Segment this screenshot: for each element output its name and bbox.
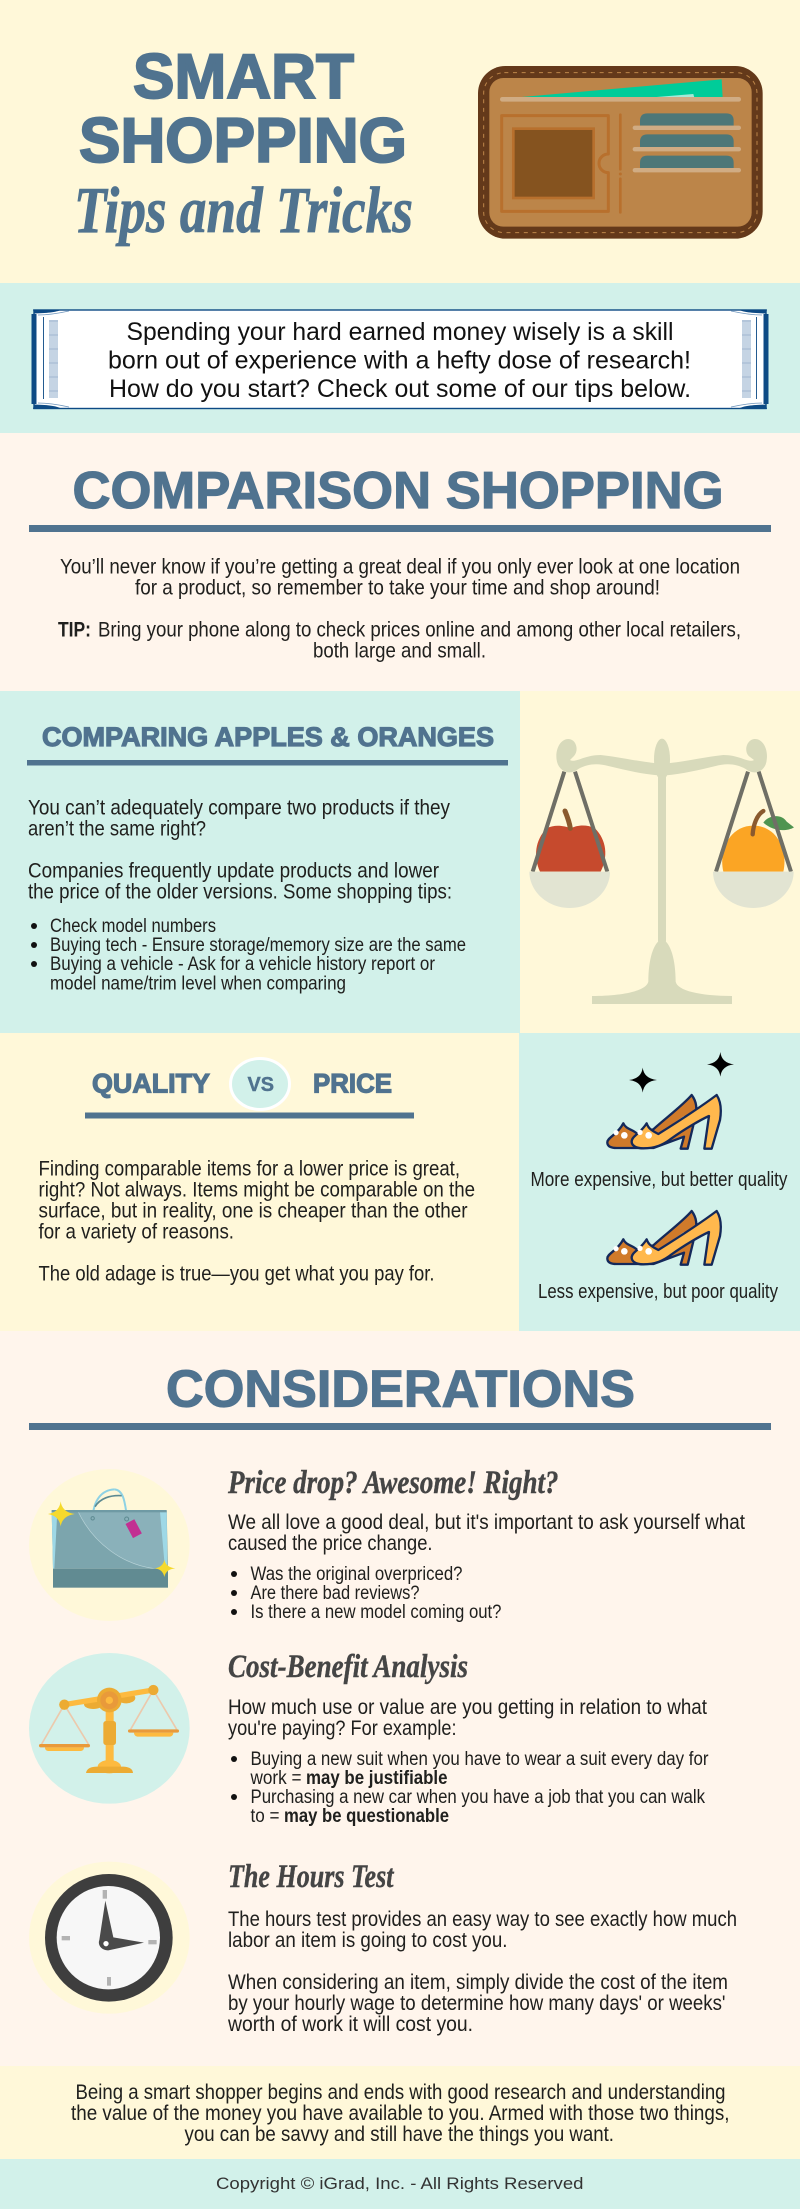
icon: wallet bbox=[478, 66, 763, 239]
heading: comparison shopping: COMPARISON SHOPPING bbox=[72, 462, 724, 520]
list: shopping tips bbox=[31, 916, 466, 994]
heading: considerations: CONSIDERATIONS bbox=[166, 1360, 635, 1418]
icon: expensive shoes bbox=[607, 1095, 721, 1149]
text: price drop body: Was the original overpriced? bbox=[250, 1564, 462, 1585]
icon: cheaper shoes bbox=[607, 1211, 721, 1265]
text: quality vs price body: Finding comparable items for a lower price is great, bbox=[38, 1158, 460, 1180]
title bbox=[74, 42, 413, 247]
heading: price drop: Price drop? Awesome! Right? bbox=[227, 1465, 558, 1501]
text: cost-benefit body bbox=[228, 1696, 709, 1827]
text: price drop body: Are there bad reviews? bbox=[250, 1583, 420, 1604]
footer: copyright: Copyright © iGrad, Inc. - All Rights Reserved bbox=[216, 2174, 584, 2193]
text: cost-benefit body: work = bbox=[250, 1768, 302, 1789]
text: quality vs price body: right? Not always. Items might be comparable on the bbox=[38, 1178, 475, 1202]
text: apples and oranges body: the price of the older versions. Some shopping tips: bbox=[28, 880, 452, 904]
text: comparison intro and tip: TIP: bbox=[58, 618, 91, 642]
list: shopping tips: Check model numbers bbox=[50, 916, 216, 937]
banner: intro: born out of experience with a hefty dose of research! bbox=[108, 346, 691, 374]
text: hours test body: worth of work it will cost you. bbox=[227, 2013, 473, 2036]
text: closing statement bbox=[71, 2081, 730, 2146]
icon: shopping bag bbox=[29, 1469, 190, 1621]
text: hours test body bbox=[227, 1908, 737, 2036]
heading: comparing apples and oranges bbox=[27, 722, 508, 766]
text: cost-benefit body: you're paying? For example: bbox=[228, 1717, 456, 1740]
text: cost-benefit body: Purchasing a new car when you have a job that you can walk bbox=[250, 1787, 705, 1808]
text: apples and oranges body bbox=[28, 796, 452, 904]
icon: clock bbox=[29, 1862, 190, 2014]
text: price drop body bbox=[228, 1511, 745, 1623]
heading: quality vs price: PRICE bbox=[313, 1068, 392, 1098]
text: hours test body: The hours test provides an easy way to see exactly how much bbox=[228, 1908, 737, 1931]
text: comparison intro and tip: for a product, so remember to take your time and shop around! bbox=[135, 576, 660, 600]
title: Tips and Tricks bbox=[74, 174, 413, 247]
icon: balance with apple and orange bbox=[529, 739, 794, 1004]
text: closing statement: you can be savvy and still have the things you want. bbox=[184, 2123, 614, 2146]
list: shopping tips: Buying a vehicle - Ask for a vehicle history report or bbox=[50, 954, 436, 975]
text: cost-benefit body: may be questionable bbox=[284, 1806, 449, 1827]
text: price drop body: Is there a new model coming out? bbox=[250, 1602, 502, 1623]
heading: quality vs price: QUALITY bbox=[92, 1068, 210, 1098]
title: SHOPPING bbox=[79, 106, 407, 176]
text: cost-benefit body: may be justifiable bbox=[306, 1768, 448, 1789]
banner: intro: How do you start? Check out some of our tips below. bbox=[109, 375, 691, 403]
text: hours test body: When considering an item, simply divide the cost of the item bbox=[228, 1971, 728, 1994]
heading: quality vs price: VS bbox=[248, 1074, 274, 1096]
text: apples and oranges body: You can’t adequately compare two products if they bbox=[28, 796, 450, 820]
text: closing statement: the value of the money you have available to you. Armed with those two things, bbox=[71, 2102, 730, 2125]
text: comparison intro and tip: You’ll never know if you’re getting a great deal if you only ever look at one location bbox=[60, 556, 740, 578]
text: hours test body: labor an item is going to cost you. bbox=[228, 1929, 508, 1952]
text: cost-benefit body: Buying a new suit when you have to wear a suit every day for bbox=[250, 1749, 709, 1770]
heading: cost-benefit analysis: Cost-Benefit Analysis bbox=[228, 1649, 468, 1685]
text: comparison intro and tip bbox=[58, 556, 741, 662]
text: comparison intro and tip: both large and small. bbox=[313, 640, 486, 662]
text: cost-benefit body: How much use or value are you getting in relation to what bbox=[228, 1696, 707, 1719]
list: shopping tips: model name/trim level when comparing bbox=[50, 974, 346, 994]
icon: sparkles bbox=[629, 1052, 734, 1093]
text: apples and oranges body: Companies frequently update products and lower bbox=[28, 860, 439, 882]
text: closing statement: Being a smart shopper begins and ends with good research and understanding bbox=[76, 2081, 726, 2104]
text: quality vs price body: The old adage is true—you get what you pay for. bbox=[38, 1262, 434, 1286]
text: quality vs price body: for a variety of reasons. bbox=[38, 1220, 234, 1244]
title: SMART bbox=[133, 42, 354, 112]
icon: cost-benefit scale bbox=[29, 1653, 190, 1804]
text: quality vs price body: surface, but in reality, one is cheaper than the other bbox=[38, 1200, 468, 1222]
text: quality vs price body bbox=[38, 1158, 475, 1286]
text: price drop body: caused the price change. bbox=[228, 1532, 432, 1555]
list: shopping tips: Buying tech - Ensure storage/memory size are the same bbox=[50, 935, 466, 956]
heading: comparing apples and oranges: COMPARING APPLES & ORANGES bbox=[42, 722, 494, 752]
text: hours test body: by your hourly wage to determine how many days' or weeks' bbox=[228, 1992, 726, 2015]
text: cost-benefit body: to = bbox=[250, 1806, 280, 1827]
banner: intro bbox=[32, 310, 768, 409]
text: apples and oranges body: aren’t the same right? bbox=[28, 818, 206, 840]
heading: the hours test: The Hours Test bbox=[228, 1859, 394, 1895]
heading: considerations bbox=[29, 1360, 771, 1430]
text: price drop body: We all love a good deal, but it's important to ask yourself what bbox=[228, 1511, 745, 1534]
banner: intro: Spending your hard earned money wisely is a skill bbox=[126, 318, 674, 346]
heading: quality vs price bbox=[85, 1058, 414, 1118]
